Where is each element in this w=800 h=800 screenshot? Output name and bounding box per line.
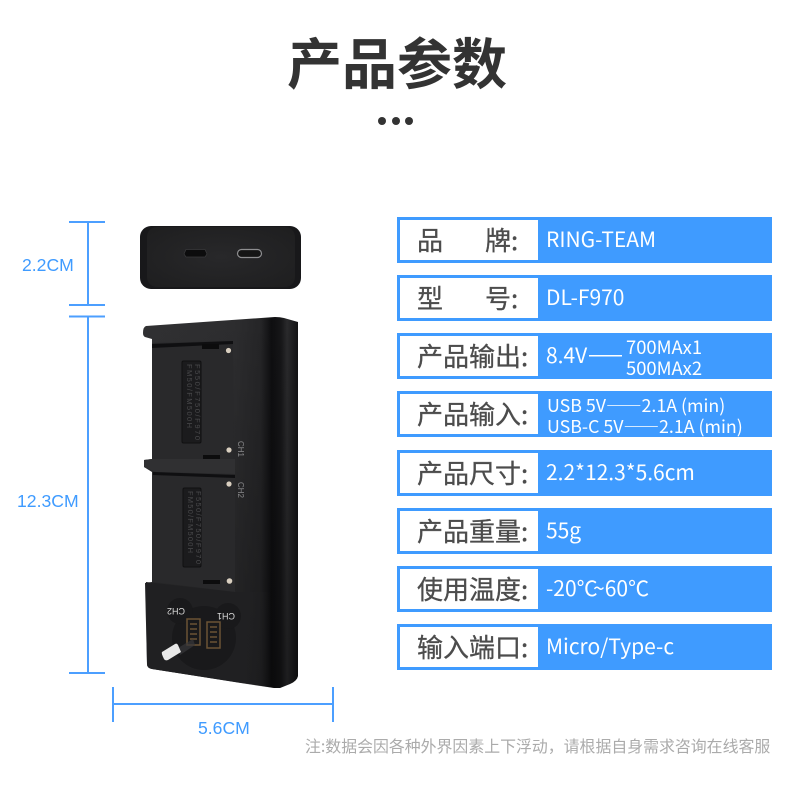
dimension label 12.3CM: 12.3CM	[17, 491, 79, 511]
row: model: 型	[417, 279, 443, 316]
row: brand: 牌	[485, 221, 511, 258]
row: model: :	[511, 279, 518, 316]
CH2 label: CH2	[236, 482, 245, 499]
row: size: 产品尺寸:	[417, 454, 528, 491]
row: output: 500MAx2	[626, 355, 702, 381]
row: size	[397, 450, 772, 496]
row: output: 700MAx1	[626, 334, 702, 360]
lower model plate	[183, 488, 201, 567]
row: brand	[397, 217, 772, 263]
row: ports: Micro/Type-c	[546, 631, 674, 661]
row: output: 产品输出:	[417, 337, 528, 374]
row: brand: :	[511, 221, 518, 258]
footnote: 注:数据会因各种外界因素上下浮动，请根据自身需求咨询在线客服	[305, 734, 770, 757]
row: brand: RING-TEAM	[546, 224, 656, 254]
lower control block	[146, 582, 272, 688]
row: ports	[397, 624, 772, 670]
lower battery slot: F550/F750/F970	[194, 491, 203, 564]
row: model	[397, 275, 772, 321]
upper battery slot: FM50/FM500H	[185, 364, 194, 428]
white switch tab	[162, 644, 181, 660]
lower terminals	[226, 481, 232, 487]
row: input: 产品输入:	[417, 395, 528, 432]
dimension label 2.2CM: 2.2CM	[22, 255, 74, 275]
row: input: USB 5V——2.1A (min)	[547, 392, 725, 418]
upper battery slot: F550/F750/F970	[193, 364, 202, 440]
title dots	[378, 117, 413, 125]
row: weight: 产品重量:	[417, 512, 528, 549]
bear-shaped status window: CH2	[167, 606, 185, 616]
light beam	[178, 639, 195, 655]
bear-shaped status window: CH1	[217, 611, 235, 621]
row: output: 8.4V	[546, 340, 587, 370]
title: 产品参数	[287, 20, 507, 100]
row: output	[397, 333, 772, 379]
micro usb port	[184, 250, 207, 257]
row: size: 2.2*12.3*5.6cm	[546, 457, 695, 487]
lower battery slot	[153, 472, 235, 592]
row: brand: 品	[417, 221, 443, 258]
type-c port	[238, 250, 262, 258]
row: model: 号	[485, 279, 511, 316]
row: weight	[397, 508, 772, 554]
row: input: USB-C 5V——2.1A (min)	[547, 413, 743, 439]
battery indicator CH1	[207, 622, 220, 648]
flange between slots	[144, 459, 235, 474]
row: temperature	[397, 566, 772, 612]
dimension label 5.6CM: 5.6CM	[198, 718, 250, 738]
row: temperature: -20℃~60℃	[546, 573, 645, 603]
row: ports: 输入端口:	[417, 628, 528, 665]
row: model: DL-F970	[546, 282, 624, 312]
row: weight: 55g	[546, 515, 581, 545]
bear-shaped status window	[162, 598, 241, 670]
main charger body	[143, 317, 298, 688]
row: temperature: 使用温度:	[417, 570, 528, 607]
upper battery slot	[152, 341, 234, 459]
battery indicator CH2	[187, 619, 200, 645]
lower battery slot: FM50/FM500H	[186, 491, 195, 553]
CH1 label: CH1	[236, 441, 245, 458]
dimension lines	[69, 222, 333, 722]
upper terminals	[226, 348, 231, 353]
upper model plate	[182, 361, 201, 443]
product illustration	[69, 221, 334, 722]
top view of device	[140, 226, 301, 289]
row: input	[397, 391, 772, 437]
